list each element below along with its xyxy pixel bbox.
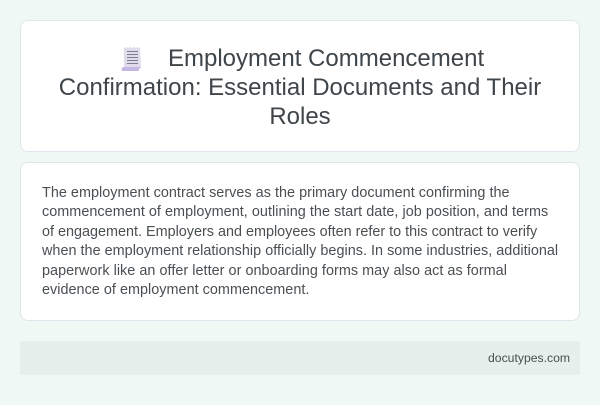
title line 2: Confirmation: Essential Documents and Their <box>59 74 541 101</box>
title <box>59 45 541 130</box>
title line 3: Roles <box>269 103 331 130</box>
icon: document receipt <box>122 47 141 71</box>
line 1: The employment contract serves as the primary document confirming the <box>42 185 510 201</box>
panel: title card <box>20 20 580 152</box>
line 3: of engagement. Employers and employees often refer to this contract to verify <box>42 224 537 240</box>
line 2: commencement of employment, outlining the start date, job position, and terms <box>42 204 548 220</box>
line 5: paperwork like an offer letter or onboarding forms may also act as formal <box>42 263 507 279</box>
footer source text: docutypes.com <box>488 351 570 365</box>
title line 1: Employment Commencement <box>168 45 484 72</box>
line 6: evidence of employment commencement. <box>42 282 309 298</box>
panel: description card <box>20 162 580 321</box>
line 4: when the employment relationship officially begins. In some industries, additional <box>42 243 558 259</box>
description text <box>42 185 558 298</box>
footer bar <box>20 341 580 375</box>
